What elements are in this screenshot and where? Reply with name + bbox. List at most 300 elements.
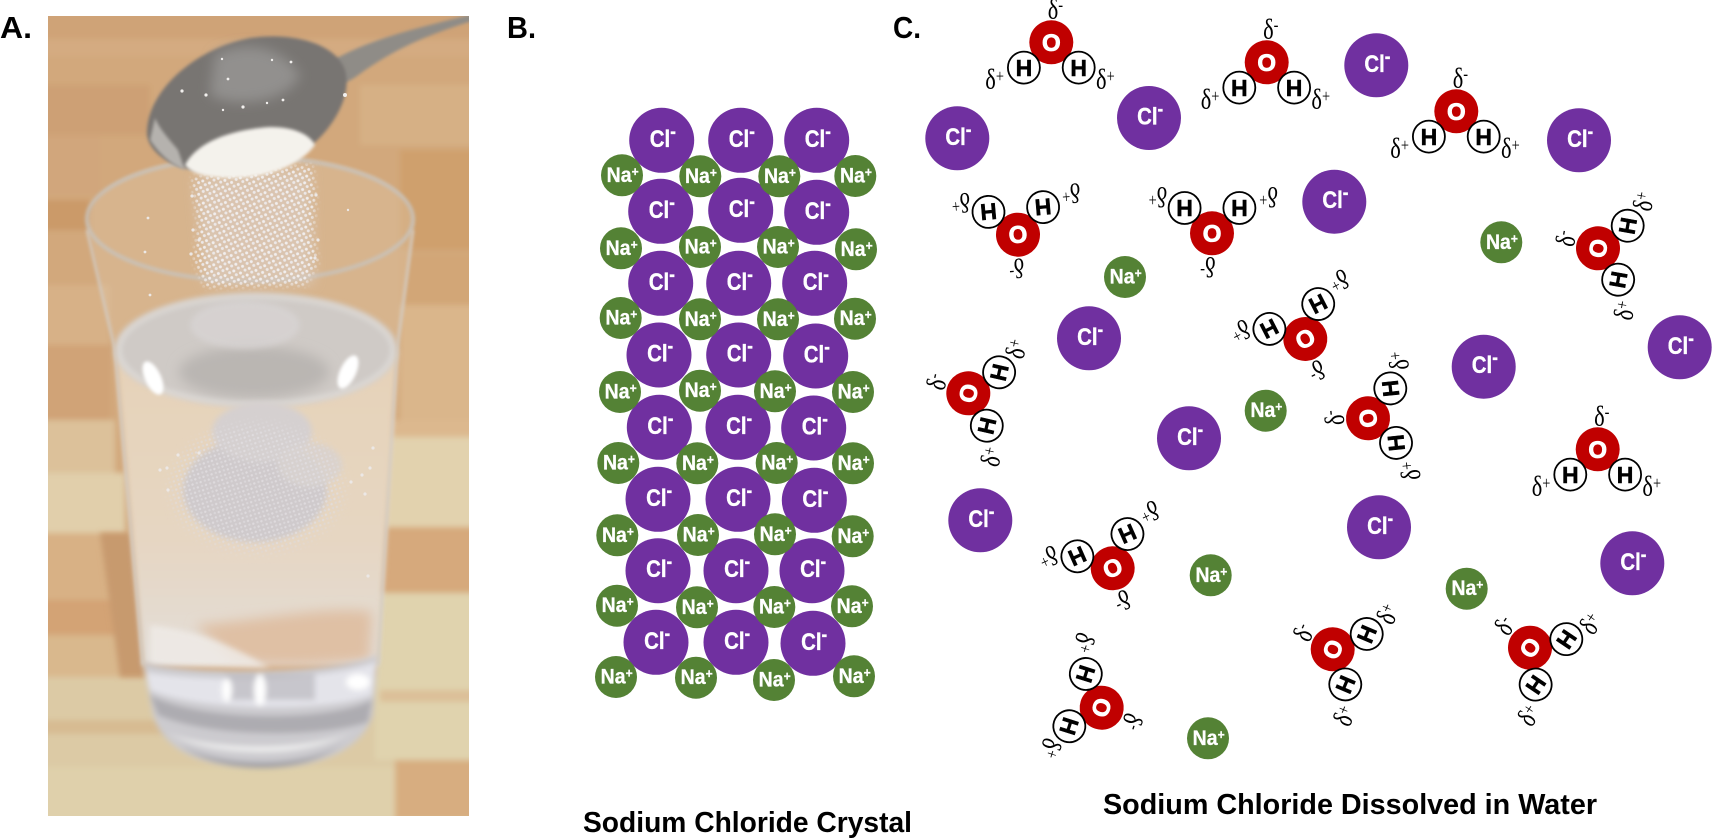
water molecule, rotated: δ bbox=[1068, 629, 1101, 648]
ion: Cl-: Cl bbox=[647, 412, 668, 439]
water molecule, rotated: O bbox=[1203, 219, 1221, 246]
water molecule, rotated: H bbox=[1382, 433, 1410, 453]
ion: Cl- bbox=[925, 106, 989, 170]
ion: Cl-: - bbox=[1385, 44, 1390, 67]
ion: Na+ bbox=[758, 155, 800, 197]
ion: Cl- bbox=[628, 251, 693, 316]
water molecule, rotated: H bbox=[1614, 215, 1642, 236]
ion: Cl-: - bbox=[670, 119, 676, 142]
water molecule, rotated: O bbox=[1514, 633, 1547, 664]
water molecule, rotated: δ bbox=[1550, 233, 1582, 249]
ion: Cl-: - bbox=[1688, 326, 1694, 349]
water molecule, rotated: H bbox=[1054, 714, 1084, 738]
ion: Na+ bbox=[679, 370, 721, 412]
photo: surface left highlight bbox=[141, 360, 165, 396]
ion: Cl- bbox=[782, 468, 847, 533]
water molecule, rotated: - bbox=[1200, 261, 1205, 282]
water molecule, rotated: - bbox=[1318, 409, 1340, 416]
water molecule: δ bbox=[1453, 63, 1463, 94]
water molecule, rotated: δ bbox=[1069, 177, 1082, 208]
water molecule, rotated: H bbox=[1034, 193, 1052, 221]
ion: Cl- bbox=[626, 467, 690, 532]
ion: Cl- bbox=[784, 108, 849, 173]
water molecule, rotated: H bbox=[1231, 195, 1248, 221]
ion: Cl- bbox=[704, 610, 768, 675]
panel label B: B. bbox=[507, 10, 536, 45]
ion: Na+: Na bbox=[839, 665, 864, 688]
water molecule, rotated: O bbox=[1098, 551, 1126, 584]
ion: Cl-: - bbox=[747, 478, 752, 501]
ion: Na+: Na bbox=[683, 524, 708, 547]
water molecule: δ bbox=[1642, 471, 1653, 502]
ion: Cl- bbox=[781, 396, 846, 460]
water molecule, rotated: δ bbox=[975, 452, 1007, 469]
water molecule: + bbox=[1653, 472, 1661, 493]
water molecule: H bbox=[1231, 75, 1248, 101]
ion: Cl- bbox=[1057, 306, 1121, 370]
ion: Na+ bbox=[756, 442, 798, 484]
photo: warm refraction near glass bottom bbox=[195, 610, 372, 665]
ion: Cl-: Cl bbox=[1620, 548, 1641, 575]
water molecule, rotated: + bbox=[1037, 551, 1053, 573]
water molecule, rotated: + bbox=[1580, 608, 1602, 626]
water molecule: δ bbox=[1390, 133, 1401, 164]
photo: spoon bowl bbox=[147, 36, 347, 172]
water molecule, rotated: + bbox=[1332, 702, 1355, 717]
ion: Na+: Na bbox=[1193, 727, 1218, 750]
water molecule, rotated: δ bbox=[1327, 709, 1359, 731]
ion: Cl- bbox=[1452, 335, 1516, 399]
ion: Na+: + bbox=[785, 523, 792, 538]
ion: Cl-: - bbox=[665, 621, 670, 644]
ion: Cl-: - bbox=[825, 191, 831, 214]
ion: Na+ bbox=[832, 371, 874, 413]
ion: Na+: Na bbox=[605, 307, 630, 330]
ion: Na+: + bbox=[863, 381, 870, 396]
water molecule, rotated: + bbox=[1041, 747, 1063, 761]
photo: spoon bright reflection bbox=[210, 47, 300, 102]
ion: Cl-: Cl bbox=[805, 197, 825, 224]
water molecule, rotated: H bbox=[1064, 541, 1090, 571]
water molecule, rotated: δ bbox=[1041, 538, 1063, 571]
ion: Cl- bbox=[706, 322, 771, 388]
ion: Cl- bbox=[1157, 406, 1221, 470]
water molecule, rotated: + bbox=[1328, 275, 1344, 297]
ion: Cl-: Cl bbox=[802, 413, 822, 440]
ion: Na+: + bbox=[786, 452, 793, 467]
ion: Cl-: - bbox=[668, 406, 673, 429]
ion: Na+: Na bbox=[685, 380, 710, 402]
ion: Na+: Na bbox=[840, 165, 865, 188]
water molecule, rotated: + bbox=[1630, 190, 1652, 201]
ion: Cl-: Cl bbox=[729, 195, 749, 222]
ion: Na+: + bbox=[630, 307, 637, 322]
ion: Na+: Na bbox=[607, 164, 632, 187]
water molecule, rotated: + bbox=[1396, 461, 1417, 471]
photo: submerged salt grains bbox=[168, 425, 346, 554]
ion: Na+: + bbox=[708, 524, 715, 539]
ion: Na+: Na bbox=[759, 596, 784, 619]
water molecule: - bbox=[1463, 63, 1468, 84]
ion: Na+: Na bbox=[601, 666, 626, 689]
water molecule: δ bbox=[1311, 84, 1322, 115]
photo: glass right wall bbox=[378, 230, 413, 665]
ion: Na+ bbox=[1245, 390, 1287, 432]
water molecule, rotated: - bbox=[1551, 228, 1573, 237]
ion: Cl-: - bbox=[1588, 119, 1593, 142]
water molecule, rotated: δ bbox=[1205, 251, 1216, 282]
ion: Cl-: Cl bbox=[726, 484, 747, 511]
ion: Na+: Na bbox=[1250, 400, 1275, 422]
water molecule, rotated: δ bbox=[1113, 583, 1136, 615]
photo: empty upper part of the glass bbox=[88, 155, 414, 350]
ion: Cl-: Cl bbox=[649, 268, 669, 295]
water molecule, rotated: H bbox=[972, 415, 1002, 437]
water molecule, rotated: δ bbox=[1000, 344, 1032, 362]
ion: Na+ bbox=[597, 442, 639, 484]
photo: glass shadow bbox=[100, 533, 145, 677]
ion: Na+: + bbox=[628, 452, 635, 467]
water molecule: δ bbox=[1594, 401, 1605, 432]
ion: Na+ bbox=[677, 514, 719, 556]
water molecule, rotated: + bbox=[951, 196, 961, 217]
water molecule, rotated: δ bbox=[1370, 607, 1403, 629]
water molecule, rotated: + bbox=[1003, 337, 1025, 349]
water molecule: H bbox=[1016, 55, 1032, 81]
ion: Cl- bbox=[784, 180, 849, 245]
ion: Na+ bbox=[834, 155, 876, 197]
ion: Na+: + bbox=[789, 165, 796, 180]
water molecule, rotated: + bbox=[1138, 506, 1154, 528]
ion: Na+: Na bbox=[685, 308, 710, 331]
ion: Na+ bbox=[835, 228, 877, 270]
water molecule, rotated: O bbox=[1290, 322, 1319, 354]
ion: Cl- bbox=[780, 611, 846, 676]
ion: Na+ bbox=[1480, 221, 1522, 263]
ion: Na+ bbox=[1187, 717, 1229, 759]
water molecule, rotated: - bbox=[1009, 263, 1015, 284]
ion: Cl-: Cl bbox=[1077, 323, 1098, 350]
water molecule, rotated: + bbox=[1229, 325, 1246, 347]
ion: Cl-: - bbox=[667, 478, 672, 501]
ion: Cl-: - bbox=[668, 334, 673, 357]
ion: Na+: Na bbox=[682, 596, 707, 619]
photo: loose salt grains bbox=[144, 193, 375, 578]
ion: Na+ bbox=[1104, 256, 1146, 298]
ion: Cl-: - bbox=[821, 550, 826, 573]
ion: Cl- bbox=[1302, 170, 1366, 234]
water molecule, rotated: H bbox=[1256, 313, 1283, 344]
water molecule: + bbox=[1401, 134, 1409, 155]
ion: Cl- bbox=[1347, 495, 1411, 559]
ion: Na+: + bbox=[866, 238, 873, 253]
water molecule, rotated: H bbox=[1330, 672, 1361, 697]
ion: Na+ bbox=[595, 656, 637, 698]
water molecule, rotated: H bbox=[1352, 621, 1382, 647]
photo: falling salt haze bbox=[195, 168, 314, 284]
water molecule, rotated: - bbox=[923, 371, 944, 380]
ion: Cl- bbox=[1117, 86, 1181, 150]
ion: Cl-: Cl bbox=[801, 628, 822, 655]
water molecule: O bbox=[1042, 30, 1061, 57]
ion: Na+: Na bbox=[603, 452, 628, 475]
ion: Na+ bbox=[679, 155, 721, 197]
ion: Na+ bbox=[757, 298, 799, 340]
ion: Cl-: - bbox=[669, 262, 675, 285]
ion: Na+: + bbox=[785, 380, 792, 395]
ion: Na+ bbox=[754, 513, 796, 555]
ion: Cl- bbox=[1600, 531, 1664, 595]
ion: Na+: + bbox=[784, 669, 791, 684]
ion: Cl-: - bbox=[1098, 317, 1103, 340]
water molecule, rotated: δ bbox=[1488, 615, 1519, 641]
water molecule: + bbox=[1211, 85, 1219, 106]
water molecule bbox=[1201, 14, 1330, 115]
ion: Na+: Na bbox=[681, 667, 706, 689]
ion: Na+: + bbox=[1220, 564, 1227, 579]
ion: Na+: Na bbox=[837, 595, 862, 618]
ion: Cl- bbox=[626, 538, 690, 603]
water molecule, rotated: δ bbox=[1608, 307, 1640, 322]
ion: Cl-: Cl bbox=[646, 484, 667, 511]
water molecule: + bbox=[996, 65, 1004, 86]
ion: Na+: + bbox=[1275, 400, 1282, 414]
water molecule, rotated bbox=[1149, 181, 1278, 282]
water molecule, rotated: - bbox=[1307, 367, 1321, 388]
ion: Cl-: - bbox=[749, 189, 755, 212]
photo: thick glass base bbox=[143, 655, 378, 768]
ion: Na+: Na bbox=[1195, 564, 1220, 587]
ion: Na+ bbox=[679, 226, 721, 268]
ion: Cl- bbox=[783, 324, 848, 388]
ion: Na+ bbox=[753, 659, 795, 701]
ion: Cl-: Cl bbox=[650, 125, 670, 152]
photo: water surface bbox=[115, 293, 397, 407]
ion: Na+: Na bbox=[685, 236, 710, 259]
water molecule: + bbox=[1512, 134, 1520, 155]
water molecule, rotated: H bbox=[1071, 662, 1101, 686]
ion: Na+: + bbox=[706, 667, 713, 681]
water molecule: - bbox=[1605, 401, 1609, 422]
ion: Cl-: - bbox=[745, 621, 750, 644]
ion: Cl-: - bbox=[989, 499, 994, 522]
water molecule bbox=[1390, 63, 1520, 164]
ion: Cl-: Cl bbox=[945, 123, 966, 150]
water molecule, rotated: δ bbox=[1395, 468, 1427, 482]
ion: Cl-: Cl bbox=[727, 340, 747, 367]
ion: Na+: Na bbox=[760, 523, 785, 546]
ion: Cl-: - bbox=[669, 190, 675, 213]
water molecule: H bbox=[1617, 462, 1633, 488]
ion: Na+: + bbox=[710, 380, 717, 394]
ion: Cl-: Cl bbox=[968, 505, 989, 532]
water molecule, rotated: H bbox=[1604, 269, 1633, 290]
photo: submerged salt haze bbox=[183, 402, 342, 542]
ion: Na+: Na bbox=[764, 165, 789, 188]
ion: Na+: Na bbox=[763, 308, 788, 331]
water molecule, rotated: O bbox=[1318, 636, 1350, 664]
ion: Na+: Na bbox=[760, 380, 785, 403]
ion: Na+: Na bbox=[761, 452, 786, 475]
photo: spoon pale edge bbox=[150, 118, 185, 170]
panel: sodium chloride crystal lattice bbox=[595, 108, 877, 701]
water molecule: δ bbox=[1263, 14, 1274, 45]
ion: Cl-: - bbox=[1158, 97, 1163, 120]
ion: Na+: + bbox=[707, 596, 714, 611]
ion: Na+: Na bbox=[840, 308, 865, 330]
ion: Na+ bbox=[675, 657, 717, 699]
ion: Na+: Na bbox=[685, 165, 710, 188]
ion: Na+: Na bbox=[602, 595, 627, 617]
ion: Cl-: Cl bbox=[803, 268, 823, 295]
ion: Cl- bbox=[708, 108, 773, 173]
ion: Na+ bbox=[596, 585, 638, 627]
ion: Cl- bbox=[629, 108, 694, 173]
ion: Na+ bbox=[596, 514, 638, 556]
ion: Cl-: Cl bbox=[649, 196, 669, 223]
water molecule, rotated: δ bbox=[1035, 735, 1068, 754]
ion: Na+: + bbox=[865, 165, 872, 180]
ion: Cl-: Cl bbox=[1177, 423, 1198, 450]
water molecule, rotated: - bbox=[1494, 611, 1514, 627]
ion: Cl-: Cl bbox=[724, 627, 745, 654]
ion: Cl-: Cl bbox=[805, 125, 825, 152]
ion: Na+: + bbox=[710, 308, 717, 323]
water molecule: δ bbox=[1201, 84, 1211, 115]
ion: Cl- bbox=[708, 178, 773, 243]
ion: Na+: Na bbox=[838, 452, 863, 475]
ion: Cl- bbox=[626, 322, 692, 388]
water molecule, rotated: O bbox=[1355, 407, 1383, 429]
ion: Na+: Na bbox=[1486, 231, 1511, 254]
ion: Na+: + bbox=[788, 236, 795, 251]
water molecule, rotated: + bbox=[1149, 189, 1157, 210]
ion: Na+: + bbox=[863, 452, 870, 467]
ion: Cl- bbox=[704, 538, 768, 603]
water molecule, rotated: + bbox=[1611, 299, 1633, 311]
photo: salt below the surface bbox=[190, 301, 300, 349]
ion: Cl- bbox=[1648, 315, 1712, 379]
water molecule: + bbox=[1107, 65, 1115, 86]
ion: Na+: + bbox=[710, 165, 717, 180]
ion: Cl- bbox=[706, 251, 771, 316]
water molecule: + bbox=[1322, 85, 1330, 106]
photo: salt poured from a spoon into a glass of water bbox=[40, 8, 480, 828]
ion: Cl-: - bbox=[667, 550, 672, 573]
water molecule, rotated: δ bbox=[958, 186, 972, 218]
ion: Na+ bbox=[833, 655, 875, 697]
photo: white refraction streak bbox=[150, 625, 270, 668]
panel label A: A. bbox=[0, 10, 32, 45]
ion: Cl-: Cl bbox=[1137, 103, 1158, 130]
water molecule, rotated: δ bbox=[1142, 493, 1164, 526]
ion: Na+: Na bbox=[682, 452, 707, 475]
water molecule: δ bbox=[1096, 64, 1107, 95]
photo: wooden table background bbox=[40, 8, 480, 828]
water molecule, rotated: δ bbox=[1319, 413, 1351, 427]
ion: Na+ bbox=[1446, 568, 1488, 610]
ion: Na+ bbox=[600, 227, 642, 269]
water molecule, rotated: δ bbox=[1331, 262, 1354, 294]
ion: Cl-: - bbox=[749, 119, 755, 142]
water molecule, rotated bbox=[1033, 493, 1193, 638]
ion: Na+ bbox=[1190, 554, 1232, 596]
water molecule, rotated: δ bbox=[1287, 624, 1319, 646]
ion: Cl-: - bbox=[823, 479, 828, 502]
ion: Na+: + bbox=[707, 452, 714, 467]
photo: surface centre tone bbox=[179, 346, 329, 398]
ion: Na+ bbox=[757, 226, 799, 268]
ion: Na+: + bbox=[788, 308, 795, 323]
water molecule, rotated: H bbox=[1551, 625, 1582, 653]
ion: Na+ bbox=[601, 154, 643, 196]
water molecule: H bbox=[1070, 55, 1087, 81]
water molecule, rotated: + bbox=[1518, 700, 1540, 718]
water molecule, rotated: O bbox=[954, 381, 985, 406]
ion: Cl-: Cl bbox=[1567, 125, 1588, 152]
ion: Cl- bbox=[780, 538, 844, 603]
water molecule, rotated: H bbox=[1377, 379, 1404, 398]
ion: Cl- bbox=[628, 179, 693, 244]
ion: Cl- bbox=[1344, 33, 1408, 97]
water molecule, rotated: H bbox=[1114, 519, 1140, 549]
ion: Cl-: - bbox=[747, 406, 752, 429]
ion: Cl-: Cl bbox=[729, 125, 749, 152]
ion: Cl- bbox=[782, 251, 847, 316]
ion: Cl- bbox=[706, 467, 770, 532]
ion: Na+: Na bbox=[838, 381, 863, 404]
ion: Na+: Na bbox=[605, 381, 630, 404]
water molecule, rotated bbox=[1032, 629, 1168, 783]
ion: Cl- bbox=[1547, 108, 1611, 172]
water molecule bbox=[1532, 401, 1661, 502]
ion: Na+: + bbox=[1135, 266, 1142, 281]
ion: Cl-: - bbox=[825, 119, 831, 142]
ion: Cl-: - bbox=[1198, 417, 1203, 440]
ion: Cl-: Cl bbox=[1367, 512, 1388, 539]
water molecule: H bbox=[1421, 124, 1437, 150]
water molecule, rotated: δ bbox=[1232, 312, 1256, 345]
water molecule: δ bbox=[1532, 471, 1542, 502]
water molecule, rotated bbox=[1262, 572, 1406, 731]
ion: Na+: + bbox=[1511, 231, 1518, 246]
ion: Na+: Na bbox=[759, 669, 784, 692]
water molecule, rotated: H bbox=[1305, 288, 1331, 319]
ion: Cl-: - bbox=[745, 550, 750, 573]
ion: Na+ bbox=[599, 371, 641, 413]
ion: Na+ bbox=[679, 298, 721, 340]
ion: Cl- bbox=[627, 395, 692, 460]
water molecule, rotated: + bbox=[1061, 186, 1071, 208]
ion: Cl- bbox=[706, 395, 770, 460]
ion: Na+: + bbox=[784, 596, 791, 611]
ion: Na+: Na bbox=[837, 525, 862, 548]
ion: Na+ bbox=[832, 442, 874, 484]
heading: crystal caption: Sodium Chloride Crystal bbox=[583, 807, 912, 839]
photo: spoon handle bbox=[336, 16, 469, 83]
ion: Na+: Na bbox=[841, 238, 866, 261]
ion: Cl-: - bbox=[1388, 506, 1393, 529]
ion: Na+: + bbox=[630, 381, 637, 396]
panel: sodium chloride dissolved in water bbox=[906, 0, 1712, 783]
water molecule, rotated: H bbox=[1520, 671, 1551, 699]
water molecule, rotated: δ bbox=[1384, 358, 1416, 372]
ion: Na+: + bbox=[1218, 727, 1225, 742]
ion: Na+: + bbox=[862, 525, 869, 540]
water molecule, rotated: O bbox=[1007, 219, 1028, 248]
water molecule, rotated: + bbox=[1074, 642, 1096, 656]
ion: Cl-: - bbox=[966, 117, 971, 140]
